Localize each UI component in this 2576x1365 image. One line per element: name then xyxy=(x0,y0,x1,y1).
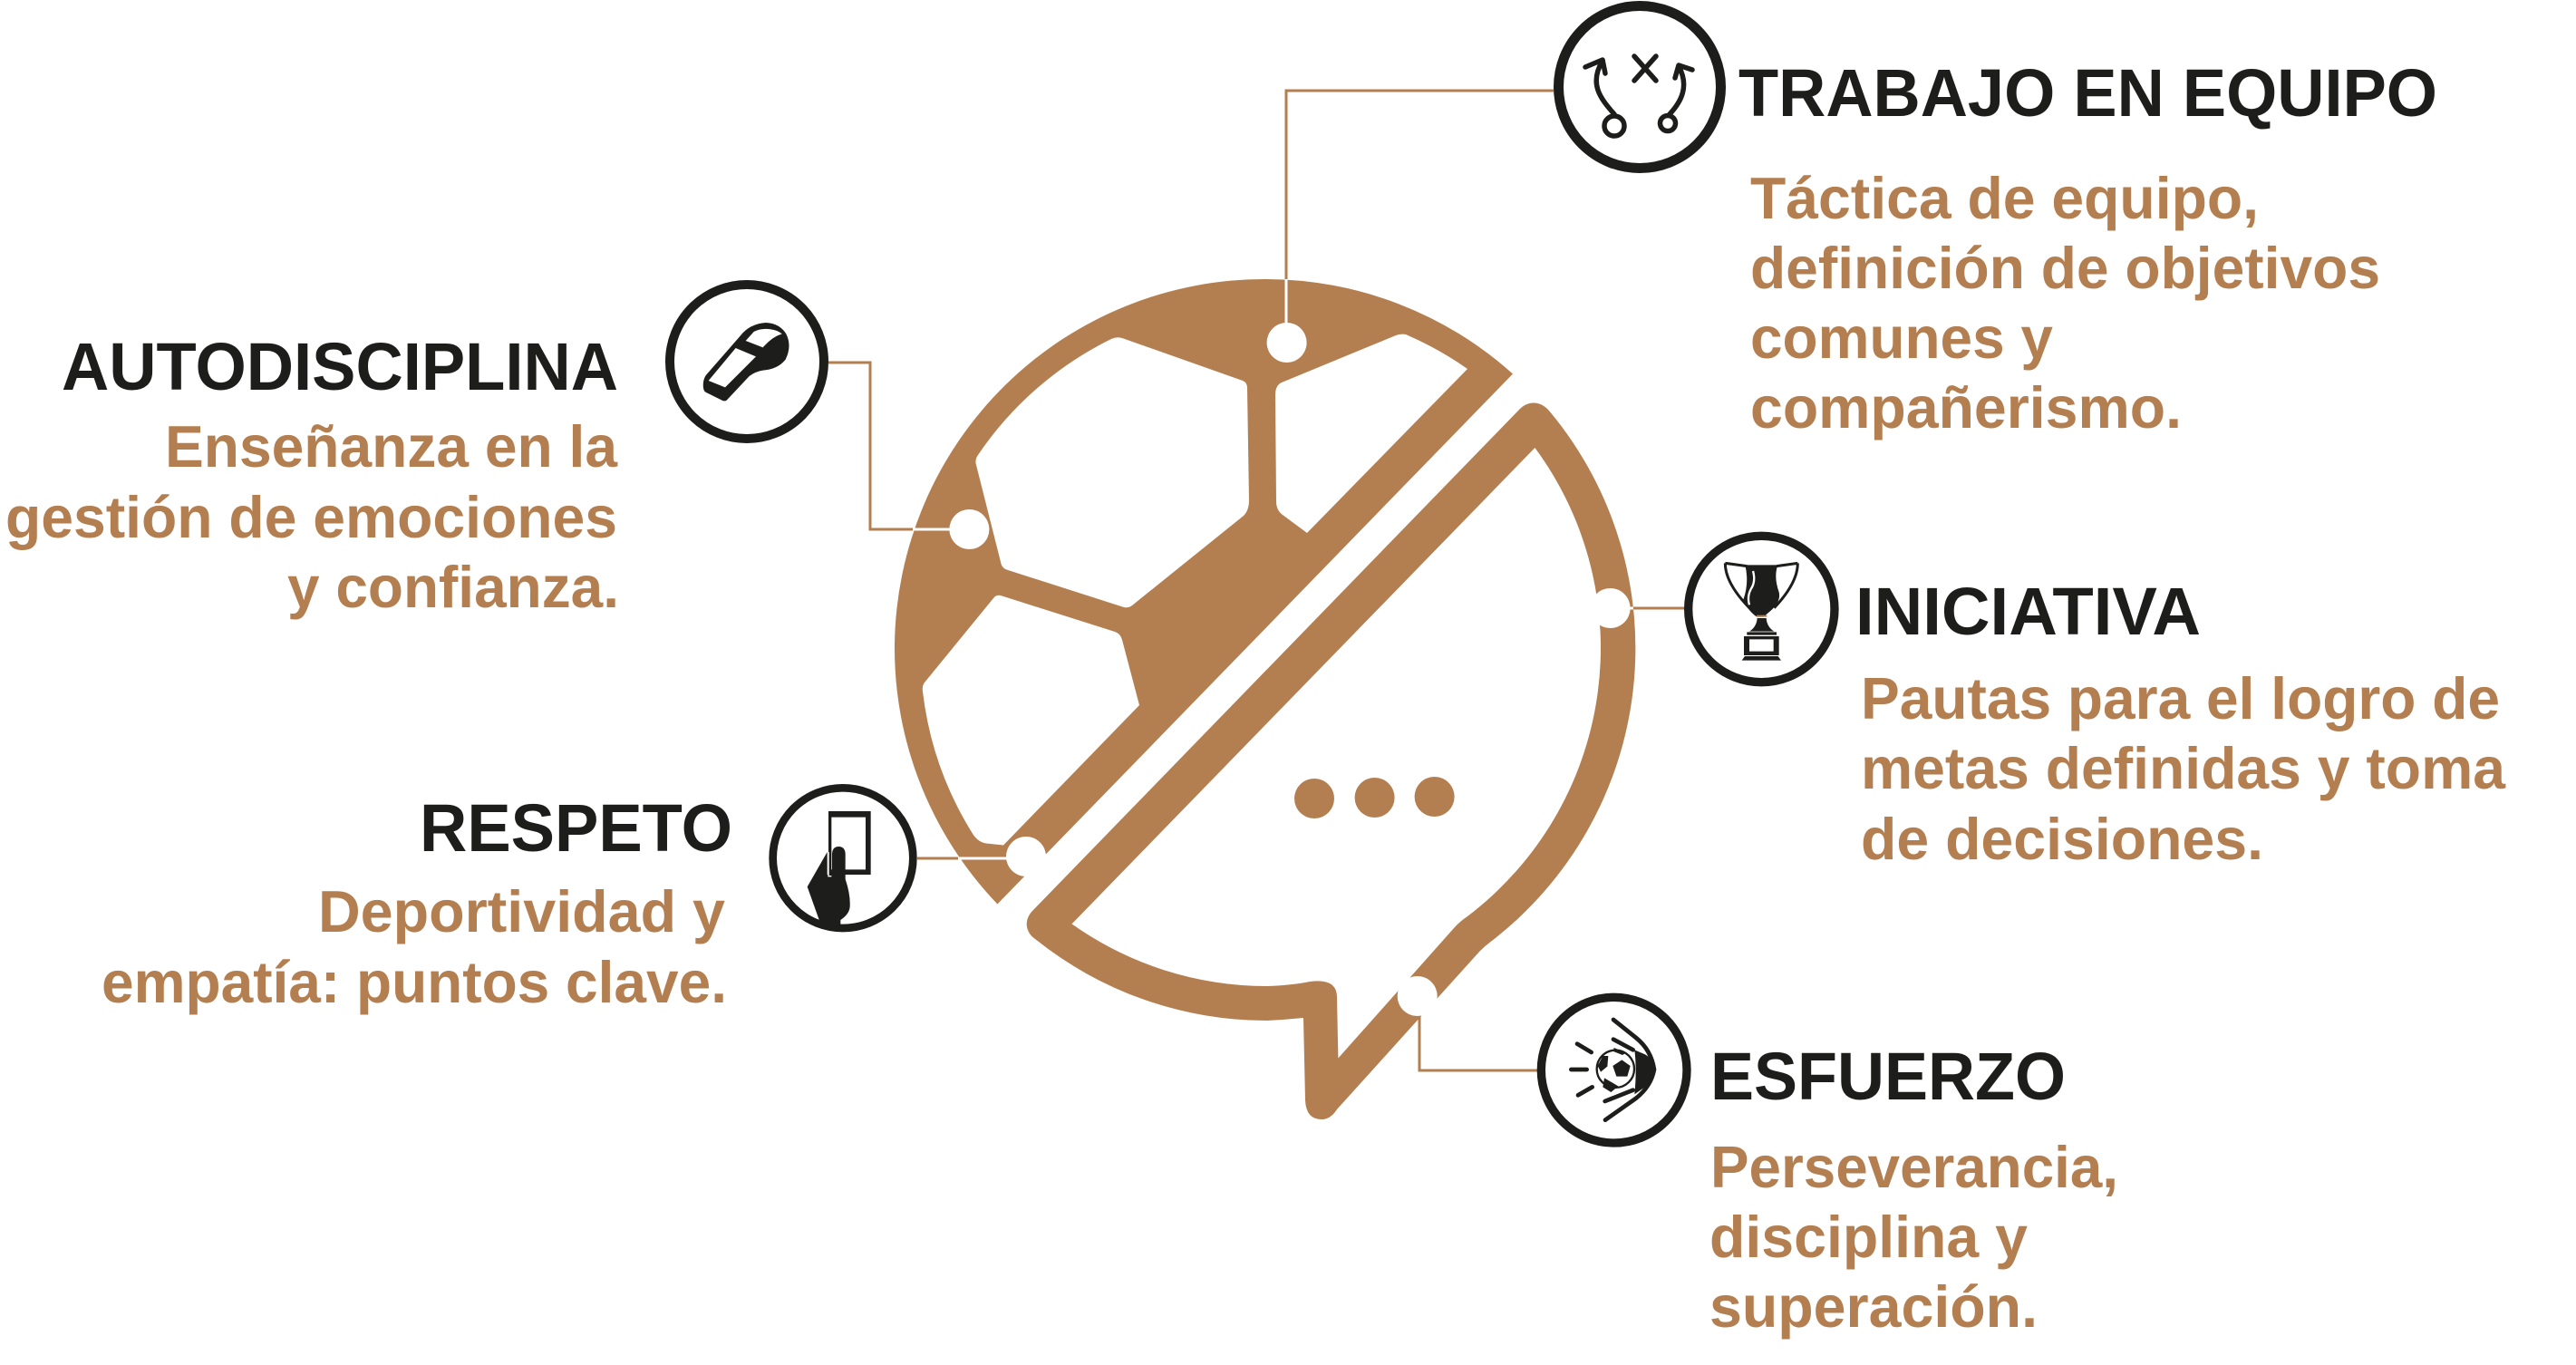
block: trabajo en equipo xyxy=(1738,55,2437,440)
heading: RESPETO xyxy=(420,790,732,866)
icon: ball in goalkeeper gloves xyxy=(1541,997,1687,1143)
typing dots xyxy=(1294,777,1455,818)
description: metas definidas y toma xyxy=(1861,735,2506,801)
block: autodisciplina xyxy=(5,329,619,620)
heading: AUTODISCIPLINA xyxy=(62,329,618,404)
description: compañerismo. xyxy=(1750,374,2182,440)
description: gestión de emociones xyxy=(5,484,617,550)
heading: ESFUERZO xyxy=(1710,1039,2066,1114)
icon: whistle xyxy=(670,285,824,439)
description: de decisiones. xyxy=(1861,806,2263,872)
connector: trabajo en equipo xyxy=(1286,91,1554,326)
description: Deportividad y xyxy=(318,878,725,944)
connector: iniciativa xyxy=(1622,607,1684,609)
icon: tactics board xyxy=(1559,5,1720,169)
description: empatía: puntos clave. xyxy=(102,949,727,1015)
connector dots xyxy=(949,323,1631,1016)
description: comunes y xyxy=(1750,305,2053,371)
description xyxy=(1861,665,2506,872)
connector: respeto xyxy=(917,857,1011,859)
description: Perseverancia, xyxy=(1710,1134,2118,1200)
description xyxy=(1750,165,2380,440)
description xyxy=(5,413,619,620)
description xyxy=(1709,1134,2118,1340)
description: Pautas para el logro de xyxy=(1861,665,2500,731)
description: disciplina y xyxy=(1709,1204,2028,1270)
block: esfuerzo xyxy=(1709,1039,2118,1340)
heading: TRABAJO EN EQUIPO xyxy=(1738,55,2437,131)
description: Táctica de equipo, xyxy=(1750,165,2259,231)
icon: trophy xyxy=(1689,536,1835,682)
icon: referee card xyxy=(773,788,913,928)
block: iniciativa xyxy=(1855,574,2506,872)
description: definición de objetivos xyxy=(1750,235,2380,301)
block: respeto xyxy=(102,790,732,1015)
connector: esfuerzo xyxy=(1419,1011,1537,1070)
description: y confianza. xyxy=(287,554,619,620)
soccer ball half xyxy=(895,279,1513,904)
connector: autodisciplina xyxy=(828,363,952,529)
description: Enseñanza en la xyxy=(165,413,618,479)
description xyxy=(102,878,727,1015)
speech bubble xyxy=(1027,402,1635,1119)
heading: INICIATIVA xyxy=(1855,574,2201,649)
description: superación. xyxy=(1709,1273,2038,1340)
